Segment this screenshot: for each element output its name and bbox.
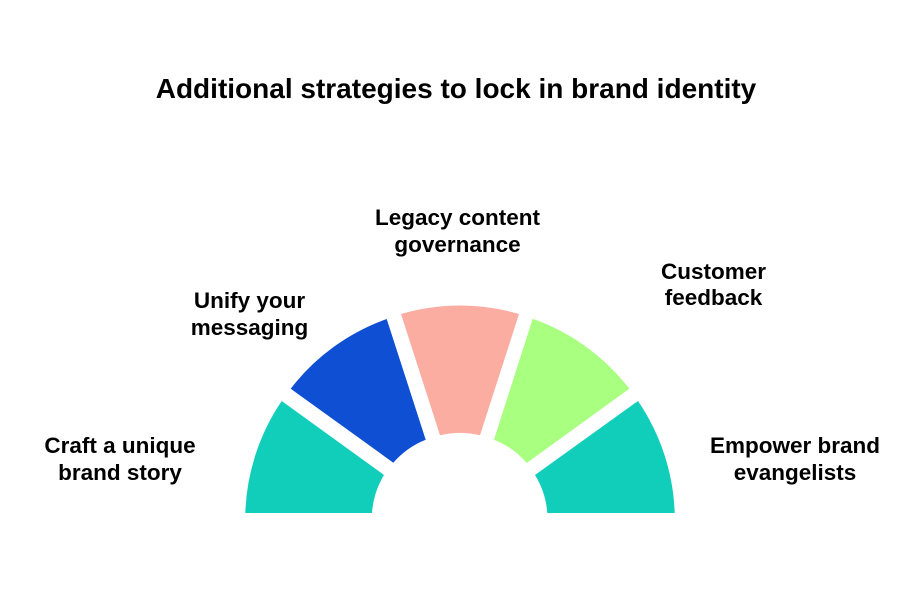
segment: customer feedback [494,319,629,463]
label: empower brand evangelists: Empower brand [710,433,880,458]
segment: craft a unique brand story [245,401,384,513]
label: unify your messaging: Unify your [194,288,305,313]
segment: legacy content governance [401,305,519,435]
label: unify your messaging: messaging [191,315,308,340]
label: legacy content governance: governance [394,232,521,257]
segment: empower brand evangelists [535,401,675,513]
label: craft a unique brand story: brand story [58,460,182,485]
gauge chart [245,305,675,513]
label: legacy content governance: Legacy content [375,205,541,230]
label: customer feedback: Customer [661,259,766,284]
segment: unify your messaging [291,319,426,463]
title: Additional strategies to lock in brand identity [156,73,757,104]
label: craft a unique brand story: Craft a unique [44,433,196,458]
label: empower brand evangelists: evangelists [734,460,856,485]
label: customer feedback: feedback [665,285,763,310]
